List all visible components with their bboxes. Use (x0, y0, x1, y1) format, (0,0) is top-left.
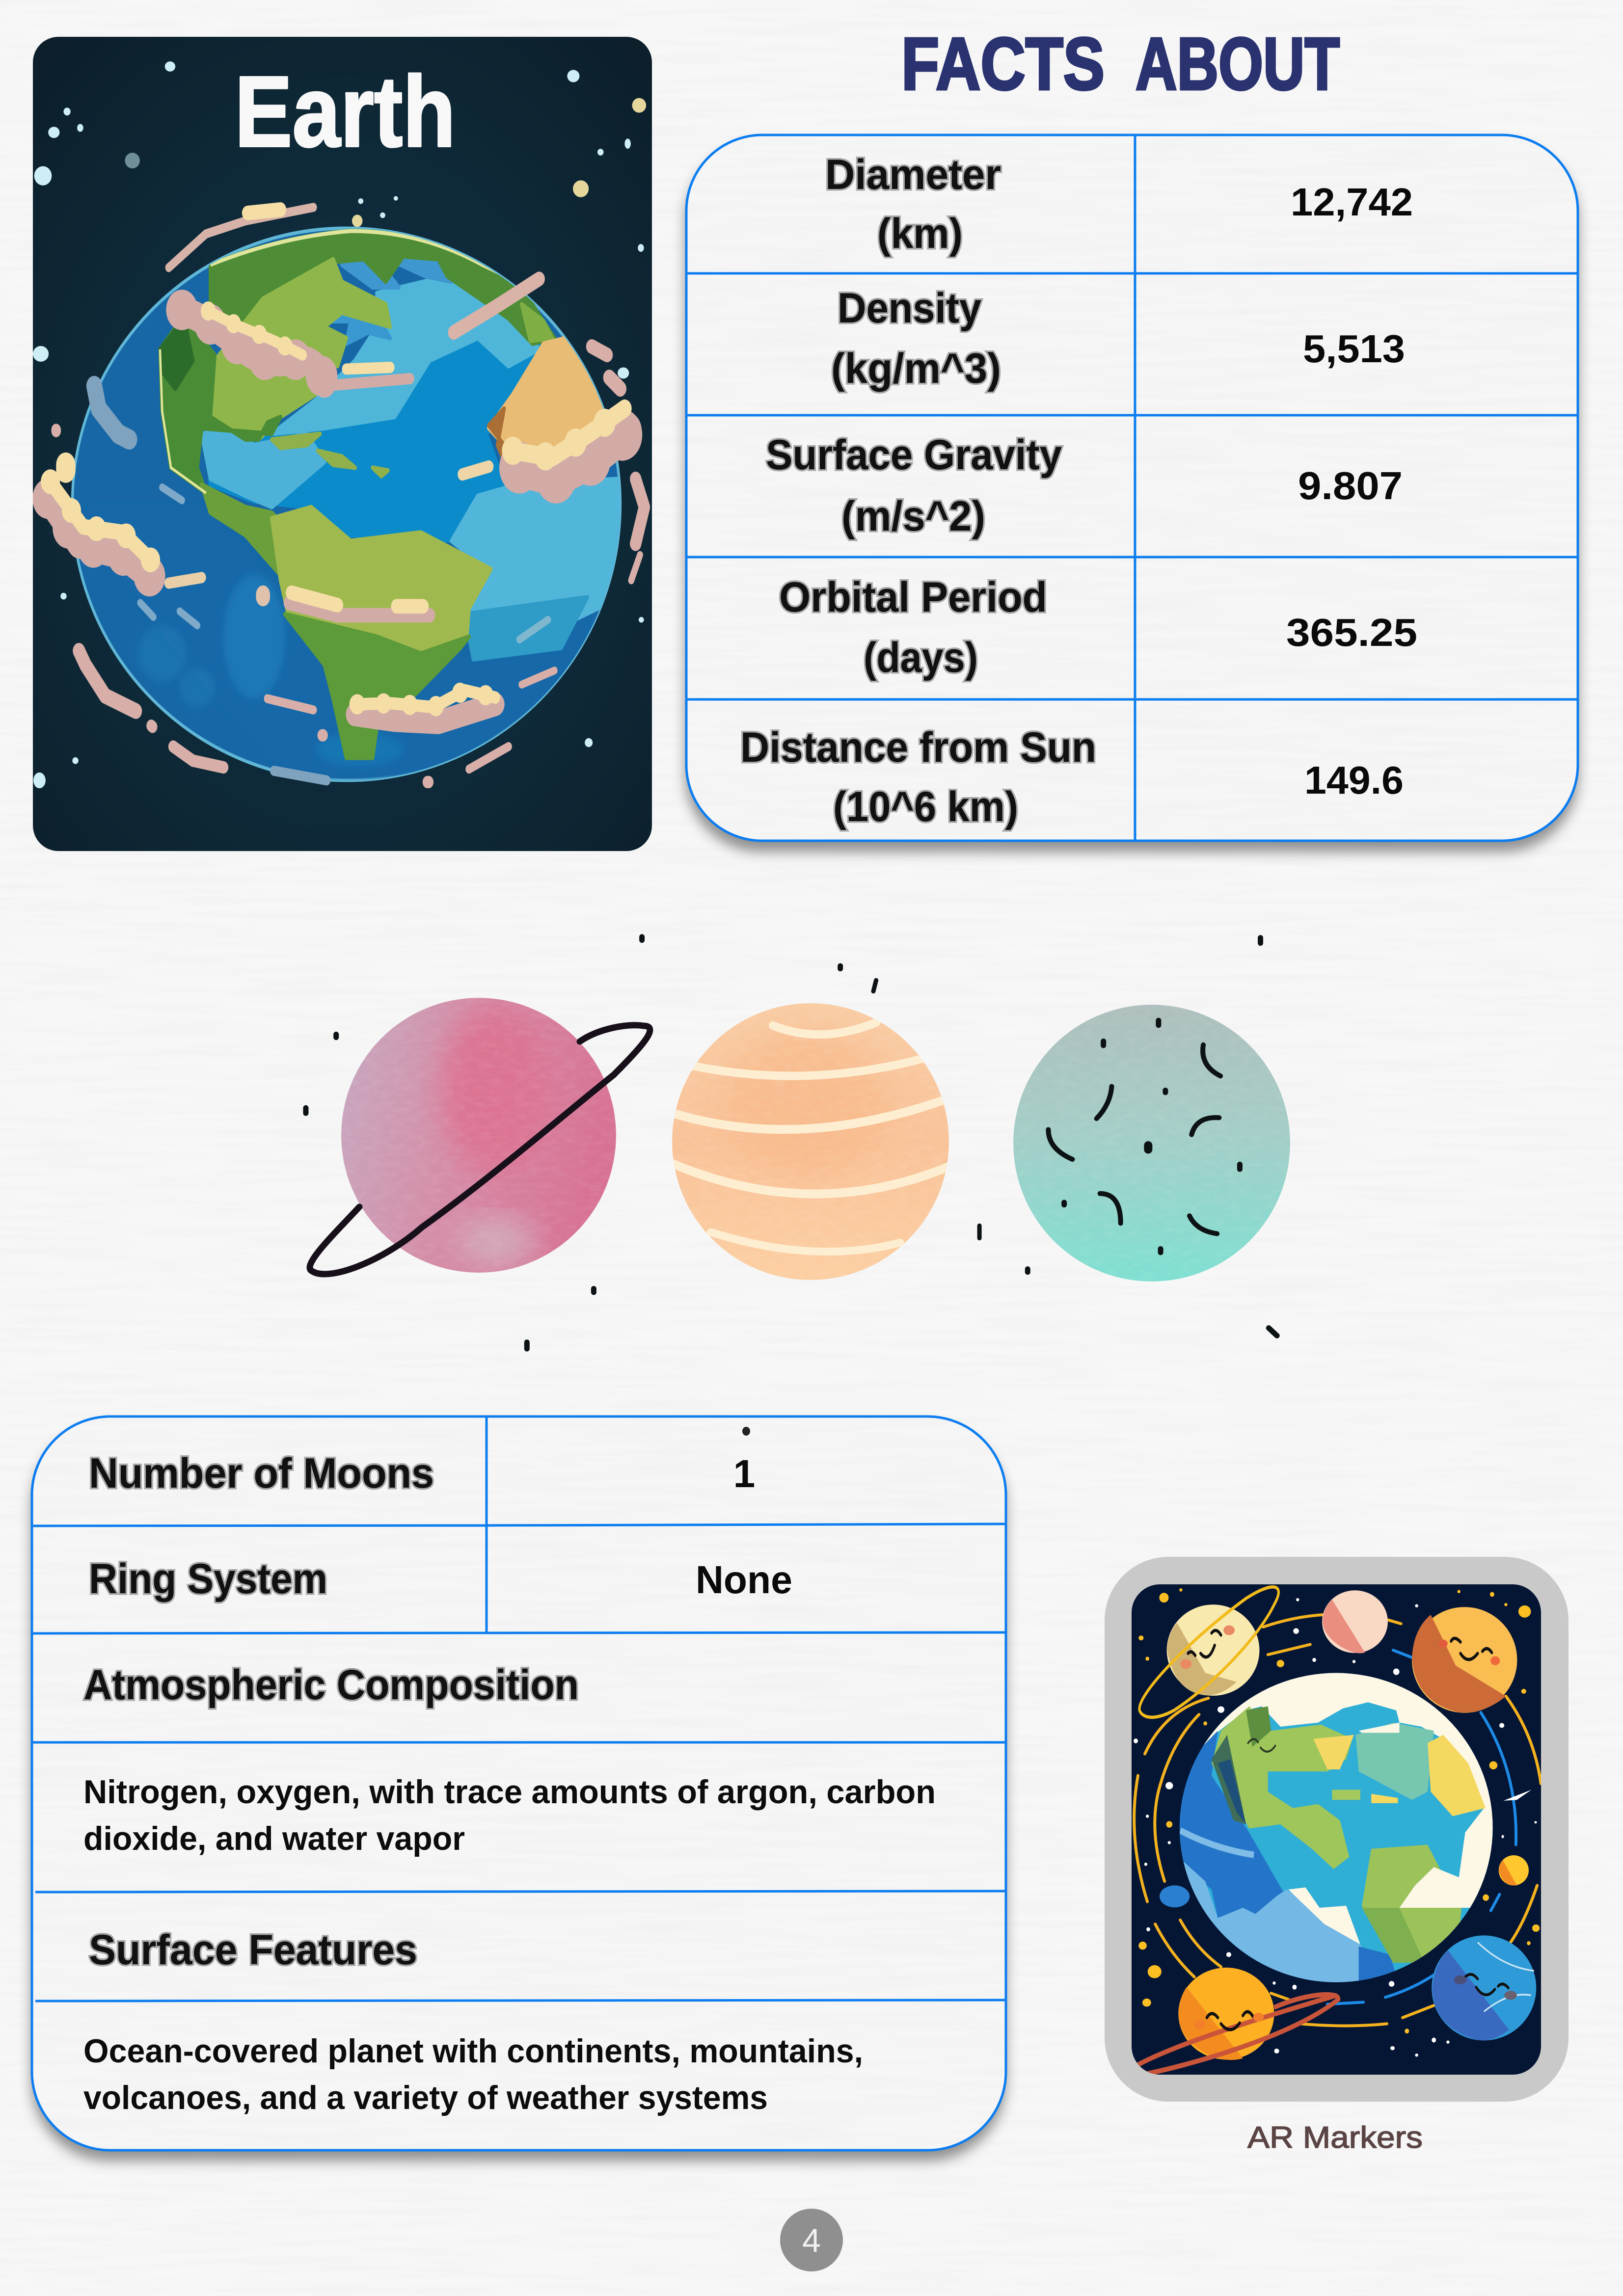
space specks and craters (306, 937, 1277, 1349)
earth globe art (33, 61, 646, 788)
AR marker illustration (1132, 1584, 1541, 2075)
row: density: 5,513 (1303, 327, 1405, 371)
orbit lines (1134, 1615, 1541, 2026)
south america (272, 507, 491, 654)
row: orbital period (779, 574, 1417, 681)
orange right planet (1412, 1607, 1517, 1713)
row: surface gravity: 9.807 (1298, 464, 1403, 507)
caption: AR markers: AR Markers (1247, 2121, 1423, 2155)
cloud: left (48, 465, 151, 578)
row: number of moons: Number of Moons (89, 1450, 434, 1497)
row: diameter: Diameter (825, 151, 1001, 198)
watercolor planets illustration (306, 937, 1290, 1349)
text: surface description (83, 2032, 863, 2116)
page number badge (780, 2209, 843, 2271)
row: number of moons (89, 1450, 755, 1497)
row: density: Density (838, 285, 981, 332)
table shadow: top (685, 134, 1578, 841)
row: ring system (89, 1555, 792, 1602)
caribbean islands (272, 434, 388, 476)
comet streak (1503, 1790, 1532, 1801)
row: orbital period: 365.25 (1286, 611, 1417, 654)
row: density (831, 285, 1405, 392)
earth face (1247, 1739, 1276, 1752)
cloud: south america (289, 593, 430, 615)
row: distance from sun: (10^6 km) (833, 783, 1018, 830)
page number badge: 4 (802, 2222, 821, 2259)
north america (211, 231, 555, 344)
row: number of moons: 1 (733, 1452, 755, 1495)
row: ring system: None (696, 1558, 792, 1602)
top left yellow planet (1139, 1587, 1278, 1717)
planet: teal cratered (1013, 1005, 1290, 1281)
small yellow planet (1499, 1855, 1529, 1885)
heading: surface features: Surface Features (89, 1926, 417, 1974)
text: surface description: Ocean-covered planet with continents, mountains, (83, 2032, 863, 2070)
row: surface gravity: Surface Gravity (766, 431, 1062, 479)
planet: peach banded (672, 1003, 952, 1280)
light clouds bottom (1174, 1853, 1362, 1987)
row: density: (kg/m^3) (831, 345, 1001, 392)
earth title: Earth (235, 55, 456, 168)
row: orbital period: (days) (864, 634, 978, 681)
dark ocean left (1174, 1731, 1287, 1918)
earth illustration card (33, 37, 652, 851)
row: distance from sun: Distance from Sun (740, 724, 1096, 771)
land (1212, 1707, 1352, 1869)
text: atmospheric description: dioxide, and water vapor (83, 1820, 465, 1857)
text: atmospheric description: Nitrogen, oxygen, with trace amounts of argon, carbon (83, 1773, 936, 1811)
heading: atmospheric composition: Atmospheric Composition (83, 1661, 579, 1709)
row: surface gravity: (m/s^2) (841, 493, 985, 540)
polar cap (1174, 1670, 1500, 1833)
bottom left orange ringed planet (1135, 1968, 1338, 2075)
title: facts about (901, 22, 1340, 105)
row: surface gravity (766, 431, 1403, 540)
table: moons, rings, composition (32, 1416, 1006, 2150)
row: diameter: 12,742 (1291, 180, 1413, 224)
clouds (48, 207, 645, 782)
title: facts about: ABOUT (1136, 22, 1340, 105)
pink planet (1322, 1590, 1388, 1653)
cloud: africa (513, 408, 627, 478)
stars (33, 61, 646, 788)
main earth (1174, 1670, 1500, 1987)
small blue asteroid (1160, 1885, 1190, 1907)
row: ring system: Ring System (89, 1555, 327, 1602)
planet ring (310, 1025, 650, 1274)
row: diameter (825, 151, 1413, 257)
cloud: bottom (355, 690, 495, 722)
row: distance from sun (740, 724, 1404, 830)
row: diameter: (km) (877, 210, 963, 257)
table shadow: bottom (31, 1416, 1006, 2150)
cloud: north america (182, 310, 410, 386)
bottom right blue planet (1432, 1935, 1536, 2040)
text: surface description: volcanoes, and a variety of weather systems (83, 2079, 768, 2116)
AR marker frame (1105, 1557, 1569, 2102)
row: distance from sun: 149.6 (1304, 758, 1404, 802)
table: earth statistics (686, 135, 1578, 841)
africa (489, 338, 612, 468)
dots (1134, 1598, 1537, 2056)
row: orbital period: Orbital Period (779, 574, 1047, 621)
title: facts about: FACTS (901, 22, 1105, 105)
planet: pink ringed (341, 998, 616, 1273)
speck (742, 1427, 750, 1436)
text: atmospheric description (83, 1773, 936, 1857)
